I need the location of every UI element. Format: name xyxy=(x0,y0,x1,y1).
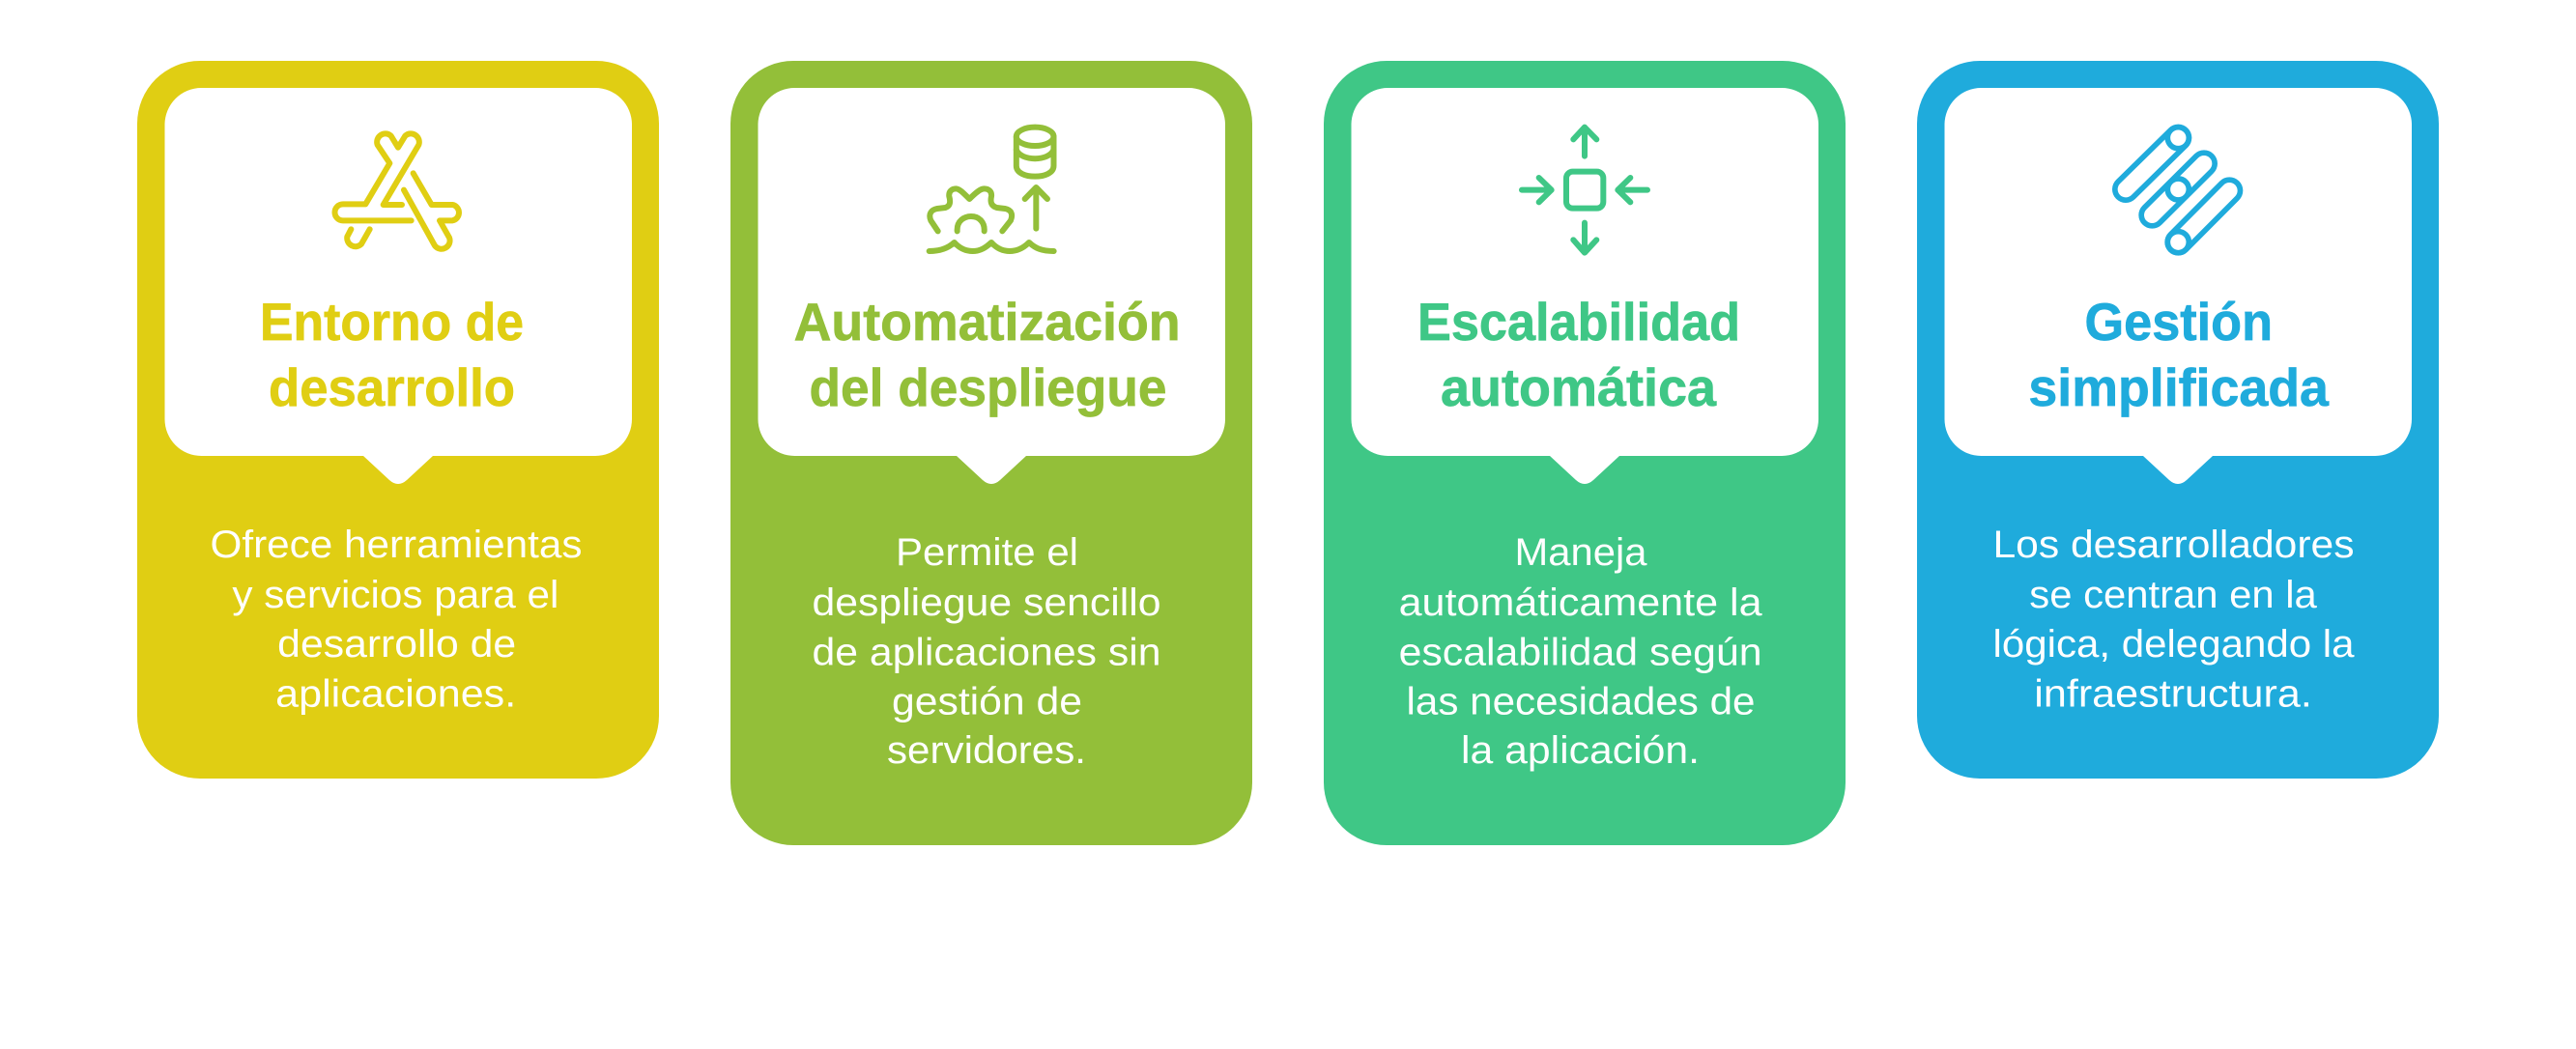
card background xyxy=(137,61,659,779)
description: la aplicación. xyxy=(1461,729,1700,772)
icon: gear, database and waves xyxy=(930,128,1054,251)
title: Entorno de xyxy=(260,292,524,352)
icon: sliders capsules xyxy=(2126,128,2229,253)
speech bubble xyxy=(1944,88,2412,484)
title: simplificada xyxy=(2028,357,2329,417)
panel: Automatización del despliegue xyxy=(730,61,1252,845)
card background xyxy=(1917,61,2439,779)
description: y servicios para el xyxy=(232,574,558,616)
description xyxy=(1992,524,2355,715)
title: Automatización xyxy=(794,292,1181,352)
icon: square with four arrows xyxy=(1522,128,1647,253)
icon: app store xyxy=(334,133,459,249)
panel: Escalabilidad automática xyxy=(1324,61,1846,845)
title xyxy=(794,292,1181,417)
description: Los desarrolladores xyxy=(1992,524,2354,566)
title: Gestión xyxy=(2085,292,2273,352)
title: Escalabilidad xyxy=(1417,292,1740,352)
description: las necesidades de xyxy=(1407,680,1755,723)
title: desarrollo xyxy=(269,357,515,417)
description: servidores. xyxy=(887,729,1086,772)
panel: Gestión simplificada xyxy=(1917,61,2439,779)
title xyxy=(260,292,524,417)
description: aplicaciones. xyxy=(275,672,516,715)
title: del despliegue xyxy=(810,357,1167,417)
description: lógica, delegando la xyxy=(1992,623,2355,666)
panel: Entorno de desarrollo xyxy=(137,61,659,779)
description: Maneja xyxy=(1515,531,1647,574)
speech bubble xyxy=(758,88,1225,484)
description xyxy=(812,531,1161,772)
card background xyxy=(730,61,1252,845)
title xyxy=(2028,292,2329,417)
description: desarrollo de xyxy=(277,623,516,666)
card background xyxy=(1324,61,1846,845)
description: escalabilidad según xyxy=(1399,632,1762,674)
description: gestión de xyxy=(892,680,1082,723)
description: se centran en la xyxy=(2029,574,2318,616)
description xyxy=(211,524,582,715)
description: despliegue sencillo xyxy=(812,581,1161,624)
title: automática xyxy=(1441,357,1716,417)
description xyxy=(1399,531,1762,772)
speech bubble xyxy=(1351,88,1818,484)
speech bubble xyxy=(164,88,632,484)
description: infraestructura. xyxy=(2034,672,2312,715)
description: de aplicaciones sin xyxy=(812,632,1161,674)
description: Ofrece herramientas xyxy=(211,524,582,566)
title xyxy=(1417,292,1740,417)
description: automáticamente la xyxy=(1399,581,1762,624)
description: Permite el xyxy=(896,531,1078,574)
